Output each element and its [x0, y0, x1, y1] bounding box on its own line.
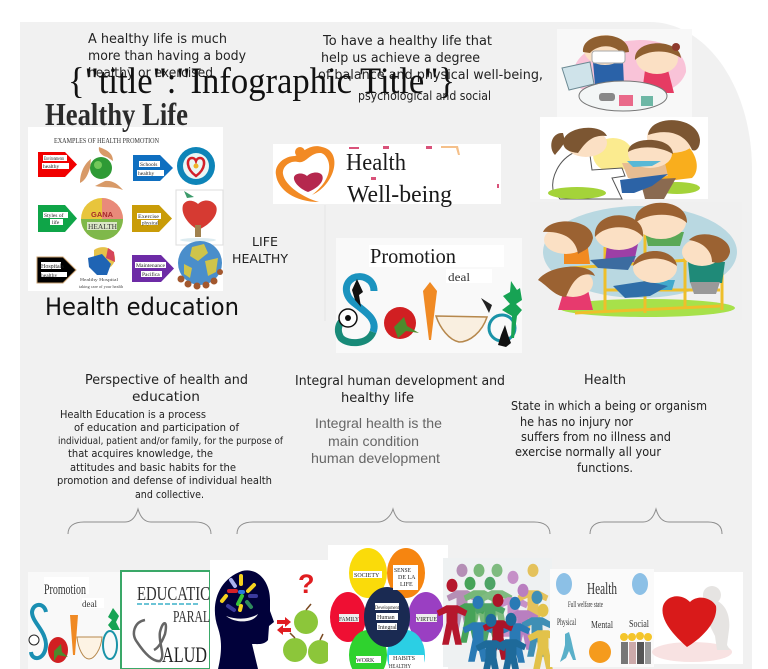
icon: red question mark: ?	[298, 569, 314, 599]
body text: functions.	[577, 461, 633, 475]
climbing frame	[570, 233, 722, 313]
body text: suffers from no illness and	[521, 430, 671, 444]
arrow: green	[38, 205, 77, 232]
category labels	[557, 617, 649, 631]
deal label: deal	[448, 270, 471, 284]
text: life healthy: HEALTHY	[232, 252, 289, 266]
body text: of education and participation of	[74, 421, 240, 434]
text: healthy life intro: A healthy life is much	[88, 32, 227, 47]
icon: red heart	[662, 596, 716, 647]
doctor	[548, 128, 625, 199]
icon: WHO emblem right	[632, 573, 648, 595]
icon: tomato	[384, 307, 419, 339]
section: perspective of health and education	[57, 373, 283, 501]
body text: that acquires knowledge, the	[68, 447, 213, 460]
child patient	[620, 140, 673, 193]
arrow: green: Styles of	[44, 212, 64, 219]
child orange	[543, 221, 593, 264]
icon: head silhouette	[215, 570, 274, 669]
panel: examples of health promotion	[28, 127, 223, 291]
body text: State in which a being or organism	[511, 399, 707, 413]
icon: exploding head	[589, 641, 611, 663]
child blue	[613, 251, 677, 298]
icon: gana health plate	[81, 198, 123, 240]
icon: healthy hospital	[79, 247, 124, 289]
text: balance definition: To have a healthy life that	[322, 34, 492, 49]
child pink	[538, 267, 595, 310]
arrow: blue: Schools	[140, 162, 157, 168]
body text: exercise normally all your	[515, 445, 661, 459]
illustration: children washing hands	[557, 29, 692, 117]
section: integral human development	[295, 374, 505, 466]
arrow: yellow: Exercise	[138, 215, 160, 220]
heading: Healthy Life: Healthy Life	[45, 96, 188, 132]
icon: school health badge	[177, 147, 215, 185]
child with mask	[583, 35, 629, 85]
icon: runner	[560, 632, 576, 662]
icon: melon slice	[436, 316, 487, 342]
flower labels: VIRTUE	[416, 617, 437, 623]
label: Promotion	[44, 582, 86, 598]
category labels: Physical	[557, 617, 576, 627]
body text: Integral health is the	[315, 415, 442, 431]
text education: EDUCATIC	[137, 583, 210, 605]
icon: red arrows	[277, 617, 291, 635]
divider line	[324, 205, 326, 321]
icon: healthy hospital: taking care of your health	[79, 284, 124, 289]
heading health: Health	[587, 579, 617, 598]
image: paper people	[437, 558, 558, 669]
flower labels: Human	[377, 615, 395, 621]
flower labels: LIFE	[400, 582, 413, 588]
logo text: Health	[346, 150, 406, 176]
image: integral development flower	[328, 545, 448, 669]
icon: pills	[222, 576, 256, 610]
child top	[635, 203, 687, 246]
flower labels: DE LA	[398, 575, 416, 581]
heading: Perspective of health and	[85, 373, 248, 388]
body text: attitudes and basic habits for the	[70, 461, 236, 474]
icon: hands and globe	[80, 147, 123, 190]
icon: healthy hospital: Healthy Hospital	[80, 277, 119, 282]
icon: green apples	[283, 604, 332, 664]
body text	[511, 399, 707, 475]
brace: right	[590, 509, 722, 534]
flower labels: FAMILY	[339, 617, 360, 623]
promotion label: Promotion	[370, 244, 456, 268]
arrow: purple: Maintenance	[136, 264, 166, 269]
title: {"title":"Infographic Title"}	[68, 61, 455, 102]
icon: heart logo	[276, 146, 334, 202]
sink	[579, 81, 667, 111]
text salud: ALUD	[162, 642, 207, 667]
text: healthy life intro: more than having a body	[88, 49, 246, 64]
illustration: children on climbing frame	[530, 202, 742, 320]
towel	[562, 62, 594, 90]
text: healthy life intro	[88, 32, 246, 81]
heading: Integral human development and	[295, 374, 505, 389]
icon: group of people	[620, 632, 652, 664]
icon: WHO emblem left	[556, 573, 572, 595]
icon: letter O and tree	[481, 281, 522, 347]
flower labels: SOCIETY	[354, 573, 380, 579]
heading: education	[132, 390, 200, 405]
icon: stethoscope	[134, 620, 166, 661]
icon: apple character	[176, 190, 223, 245]
icon: hand	[226, 614, 258, 621]
image: WHO health	[550, 569, 654, 667]
child purple	[590, 215, 643, 270]
arrow: black	[37, 257, 76, 283]
logo remnants	[349, 146, 499, 188]
text: balance definition: psychological and social	[358, 89, 491, 103]
illustration: doctor and child	[540, 117, 708, 199]
label deal: deal	[82, 599, 97, 609]
text para la: PARAL	[173, 607, 210, 626]
category labels: Social	[629, 618, 649, 630]
arrow: red: Environments	[44, 157, 64, 162]
body text: individual, patient and/or family, for the purpose of	[58, 436, 283, 447]
text: life healthy	[232, 235, 289, 266]
icon: gana health plate: GANA	[91, 210, 114, 219]
brace: middle	[237, 509, 550, 534]
arrow: purple	[132, 255, 174, 282]
arrow: black: Hospitals	[41, 264, 64, 270]
icon: letter S	[338, 277, 374, 343]
image: brain and apples	[210, 560, 332, 669]
heading: healthy life	[341, 391, 414, 406]
arrow: yellow	[132, 205, 172, 232]
category labels: Mental	[591, 619, 613, 631]
flower labels: HABITS	[393, 656, 415, 662]
logo panel: health and well-being	[273, 144, 501, 208]
heading: Health	[584, 373, 626, 388]
text: balance definition: of balance and physical well-being,	[318, 68, 543, 83]
flower labels: WORK	[356, 658, 375, 664]
heading	[295, 374, 505, 406]
flower labels: Development	[375, 605, 399, 611]
body text	[311, 415, 442, 466]
body text: promotion and defense of individual health	[57, 474, 272, 487]
arrow: green: life	[52, 219, 60, 226]
child with pink shirt	[635, 43, 681, 93]
body text: main condition	[328, 433, 419, 449]
flower labels	[339, 568, 437, 669]
panel heading: EXAMPLES OF HEALTH PROMOTION	[54, 136, 159, 145]
image: education for health	[121, 571, 210, 669]
heading: Health education: Health education	[45, 293, 239, 321]
state line: Full welfare state	[568, 600, 603, 609]
body text	[57, 408, 283, 501]
image: promotion small	[28, 572, 120, 669]
arrow: blue: healthy	[138, 171, 154, 177]
logo text second line: Well-being	[347, 182, 452, 208]
brace: left	[68, 509, 211, 534]
mother	[640, 120, 700, 199]
arrow: black: healthy	[41, 273, 57, 279]
body text: Health Education is a process	[60, 408, 206, 421]
icon: gana health plate: HEALTH	[88, 222, 118, 231]
body text: human development	[311, 450, 440, 466]
flower labels: SENSE	[394, 568, 411, 574]
image: person hugging heart	[652, 572, 743, 664]
arrow: red	[38, 152, 77, 177]
icon: earth with children	[178, 241, 223, 290]
icon: white figure	[698, 586, 730, 650]
text: healthy life intro: healthy or exercised	[88, 66, 213, 81]
arrow: purple: Pacifica	[142, 271, 160, 278]
body text: and collective.	[135, 488, 204, 501]
body text: he has no injury nor	[520, 415, 633, 429]
heading	[85, 373, 248, 405]
section: health	[511, 373, 707, 475]
text: balance definition	[318, 34, 543, 103]
icon: carrot	[423, 282, 437, 340]
arrow: blue	[133, 155, 173, 181]
text: life healthy: LIFE	[252, 235, 278, 249]
flower labels: Integral	[378, 625, 397, 631]
arrow: red: healthy	[43, 164, 59, 170]
text: balance definition: help us achieve a degree	[321, 51, 480, 66]
panel: health promotion logo	[336, 238, 522, 353]
child green	[682, 234, 730, 294]
arrow: yellow: physical	[142, 222, 159, 226]
